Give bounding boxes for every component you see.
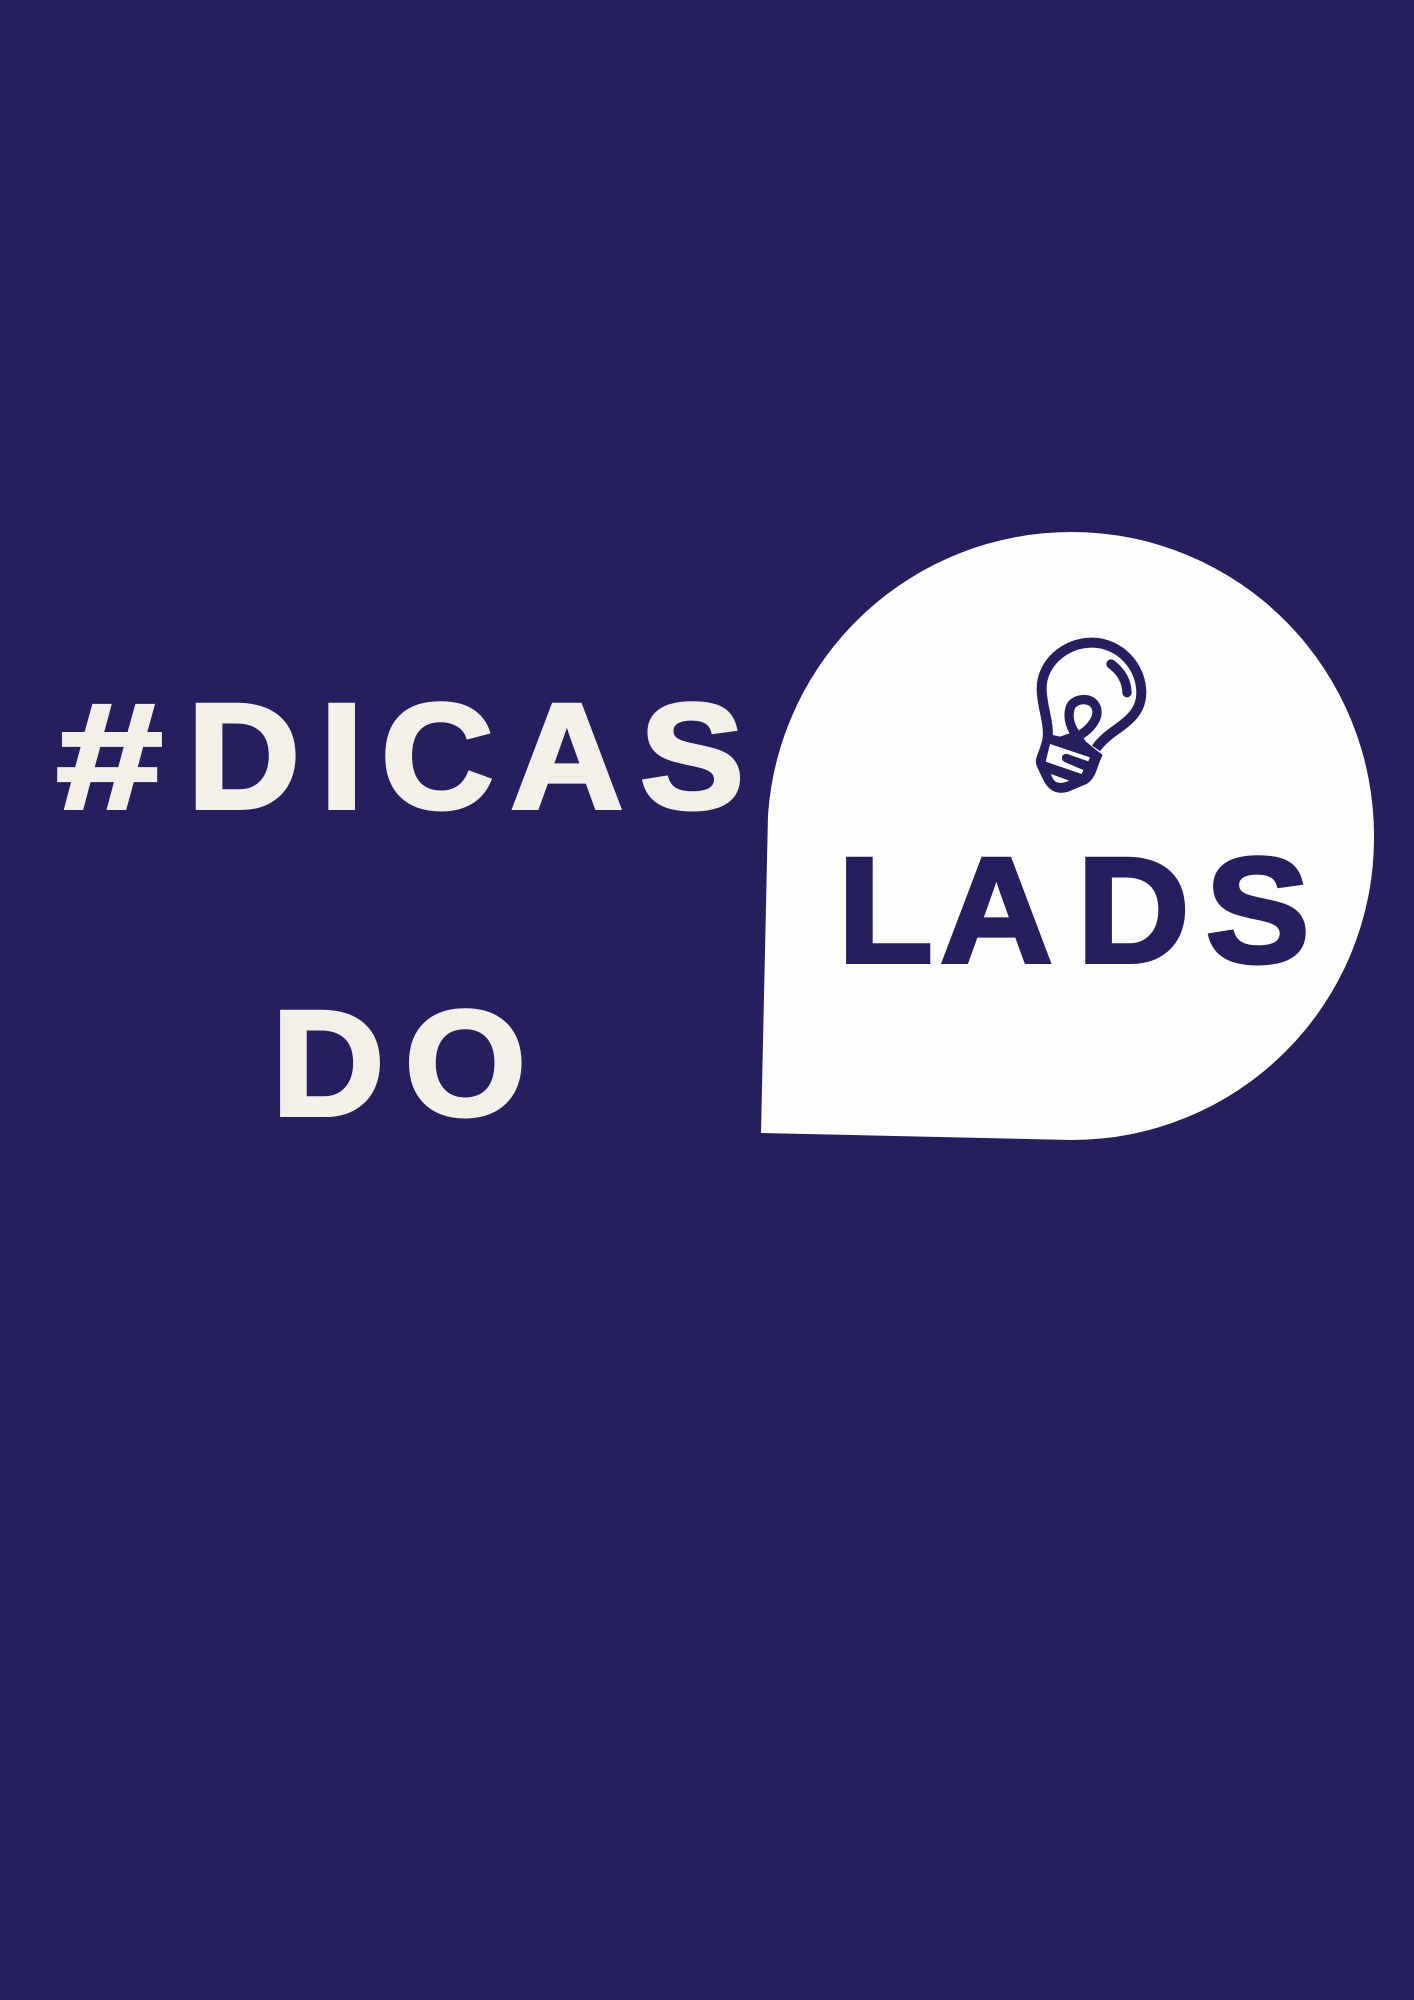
heading: #DICAS DO bbox=[57, 673, 744, 1147]
base tip highlight bbox=[1051, 774, 1069, 783]
icon: light bulb bbox=[1036, 643, 1141, 793]
heading hash symbol: # bbox=[57, 673, 162, 840]
base highlight slits bbox=[1046, 744, 1090, 774]
heading word: DICAS: DICAS bbox=[187, 673, 744, 840]
glass reflection bbox=[1111, 664, 1127, 693]
speech bubble shape bbox=[761, 532, 1374, 1140]
bulb glass outline bbox=[1042, 643, 1141, 748]
logo word: LADS: LADS bbox=[838, 827, 1310, 994]
filament loop bbox=[1069, 700, 1097, 737]
heading word: DO: DO bbox=[272, 980, 526, 1147]
bulb screw base bbox=[1036, 733, 1103, 793]
panel: speech bubble with logo bbox=[761, 532, 1374, 1140]
